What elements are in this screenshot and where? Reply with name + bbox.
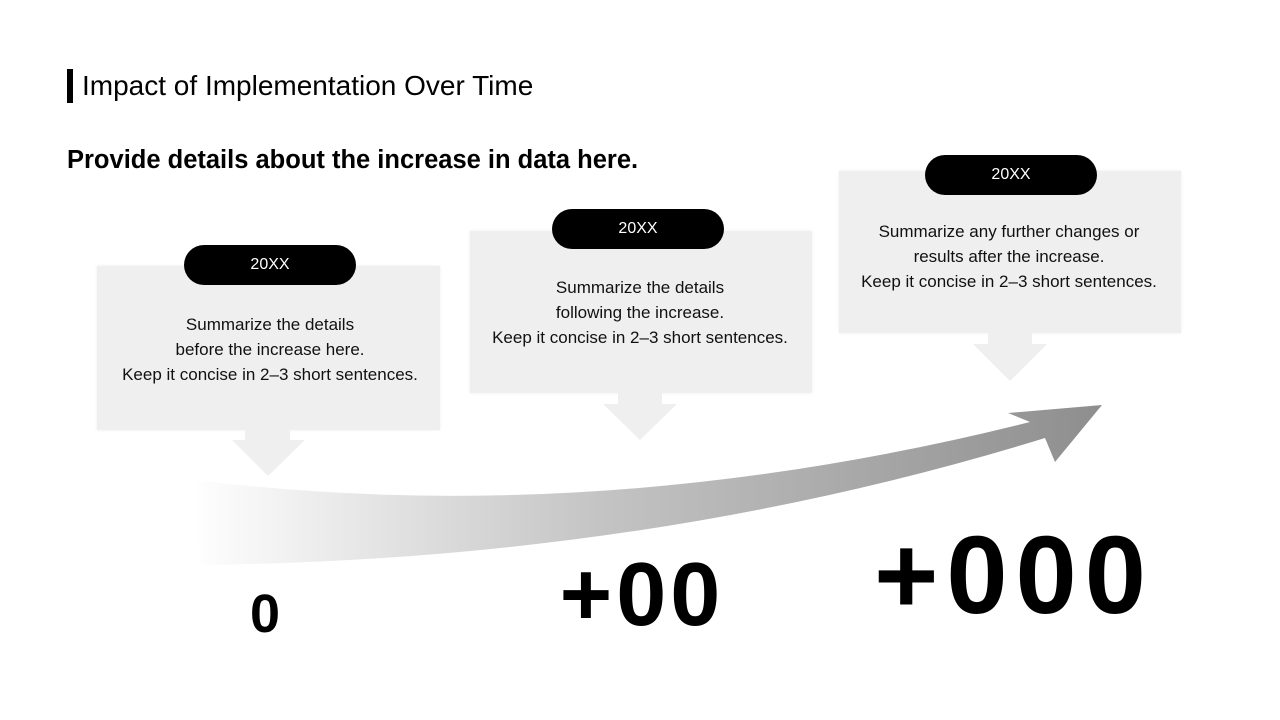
- text: Summarize the details: [556, 278, 724, 297]
- number +000: +000: [874, 514, 1154, 637]
- arrow: [195, 405, 1102, 565]
- panel: further: [839, 171, 1181, 333]
- text: 20XX: [250, 256, 290, 273]
- text: before the increase here.: [175, 340, 364, 359]
- text: Impact of Implementation Over Time: [82, 70, 533, 101]
- number 0: 0: [250, 584, 280, 644]
- panel: following: [470, 231, 812, 393]
- text: Keep it concise in 2–3 short sentences.: [861, 272, 1157, 291]
- panel: before: [97, 266, 440, 430]
- subtitle: Provide details about the increase in data here.: [67, 146, 638, 174]
- text: Summarize the details: [186, 315, 354, 334]
- text: Summarize any further changes or: [879, 222, 1139, 241]
- number +00: +00: [560, 545, 724, 645]
- text: 20XX: [991, 166, 1031, 183]
- box pointers: [232, 330, 1047, 476]
- text: Keep it concise in 2–3 short sentences.: [492, 328, 788, 347]
- title: [67, 69, 533, 103]
- text: Keep it concise in 2–3 short sentences.: [122, 365, 418, 384]
- text: following the increase.: [556, 303, 724, 322]
- text: results after the increase.: [914, 247, 1104, 266]
- text: 20XX: [618, 220, 658, 237]
